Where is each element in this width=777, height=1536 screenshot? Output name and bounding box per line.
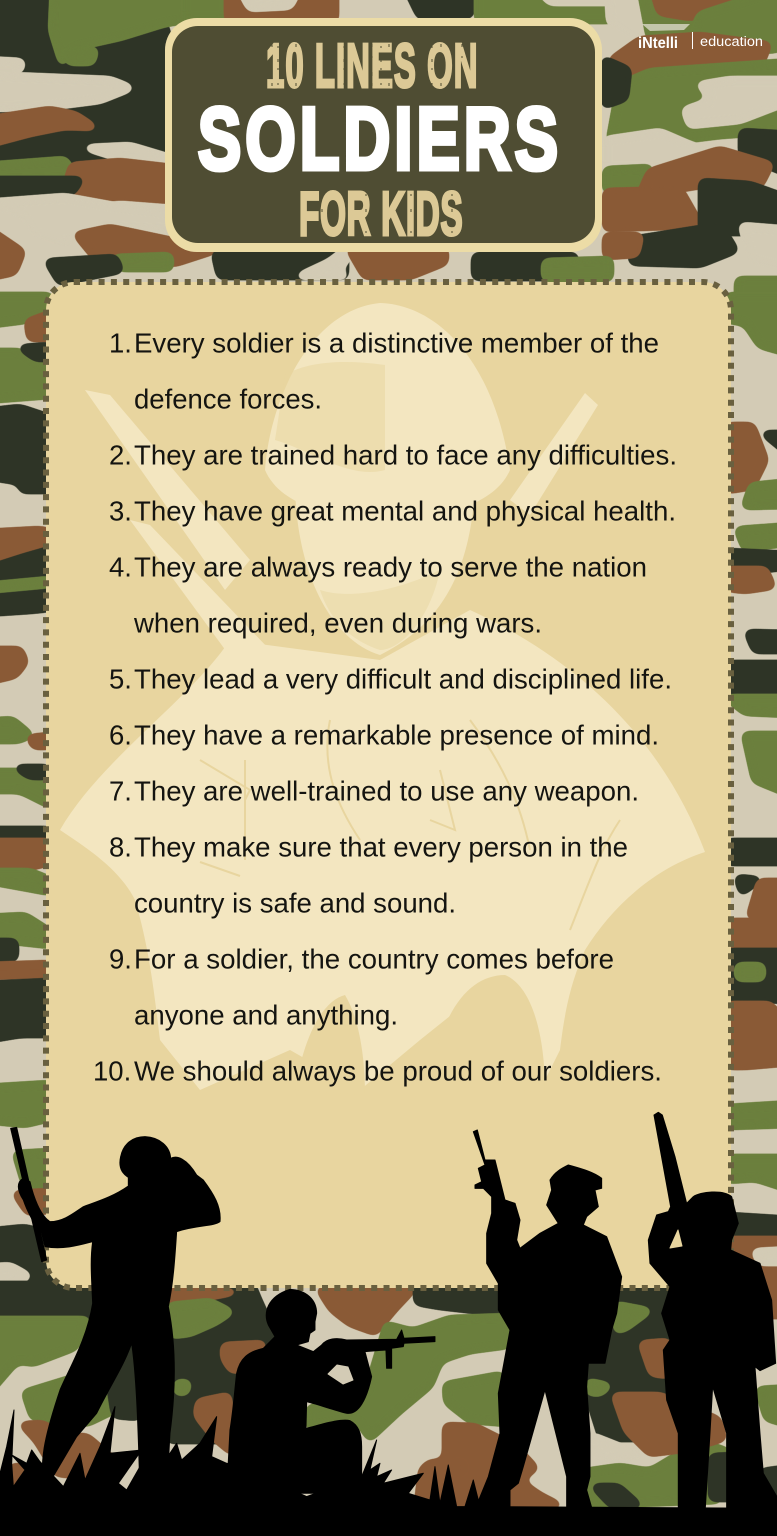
item 4: They are always ready to serve the nation — [134, 552, 647, 582]
item 6: 6. — [109, 720, 132, 750]
item 3: 3. — [109, 496, 132, 526]
soldier: standing with raised rifle and beret — [473, 1130, 622, 1513]
item 7: 7. — [109, 776, 132, 806]
item 3: They have great mental and physical health. — [134, 496, 676, 526]
item 1: Every soldier is a distinctive member of the — [134, 328, 659, 358]
item 8: They make sure that every person in the — [134, 832, 628, 862]
item 2: They are trained hard to face any difficulties. — [134, 440, 677, 470]
list lines — [93, 328, 677, 1086]
item 4: 4. — [109, 552, 132, 582]
right strip — [728, 296, 777, 354]
item 1: 1. — [109, 328, 132, 358]
item 10: We should always be proud of our soldiers. — [134, 1056, 662, 1086]
logo: Intelli education — [638, 24, 763, 52]
bottom camo — [0, 1285, 272, 1440]
title line: soldiers: SOLDIERS — [198, 90, 562, 188]
item 10: 10. — [93, 1056, 131, 1086]
item 9: 9. — [109, 944, 132, 974]
watermark: soldier illustration — [60, 303, 705, 1095]
gap between arm and rifle — [670, 1230, 682, 1248]
title line: 10 lines on: 10 LINES ON — [266, 31, 478, 101]
soldier: kneeling with rifle — [227, 1289, 435, 1493]
grass and ground — [0, 1407, 777, 1536]
item 9: For a soldier, the country comes before — [134, 944, 614, 974]
item 1: defence forces. — [134, 384, 322, 414]
watermark darker details — [160, 362, 620, 1095]
left strip — [0, 296, 50, 325]
item 6: They have a remarkable presence of mind. — [134, 720, 659, 750]
title line: for kids: FOR KIDS — [299, 179, 463, 249]
panel: ten lines list — [46, 282, 731, 1288]
item 4: when required, even during wars. — [133, 608, 542, 638]
title badge — [165, 18, 602, 252]
soldier: standing aiming rifle upward — [648, 1112, 777, 1513]
item 7: They are well-trained to use any weapon. — [134, 776, 639, 806]
item 5: 5. — [109, 664, 132, 694]
silhouettes: soldiers and grass — [0, 1112, 777, 1536]
soldier: saluting with baton — [11, 1127, 220, 1493]
item 5: They lead a very difficult and disciplined life. — [134, 664, 672, 694]
item 9: anyone and anything. — [134, 1000, 398, 1030]
item 8: country is safe and sound. — [134, 888, 456, 918]
item 2: 2. — [109, 440, 132, 470]
logo: Intelli education: education — [700, 34, 763, 49]
item 8: 8. — [109, 832, 132, 862]
distress specks on title — [272, 44, 462, 236]
logo: Intelli education: iNtelli — [638, 35, 678, 52]
gap under rifle — [328, 1365, 353, 1384]
